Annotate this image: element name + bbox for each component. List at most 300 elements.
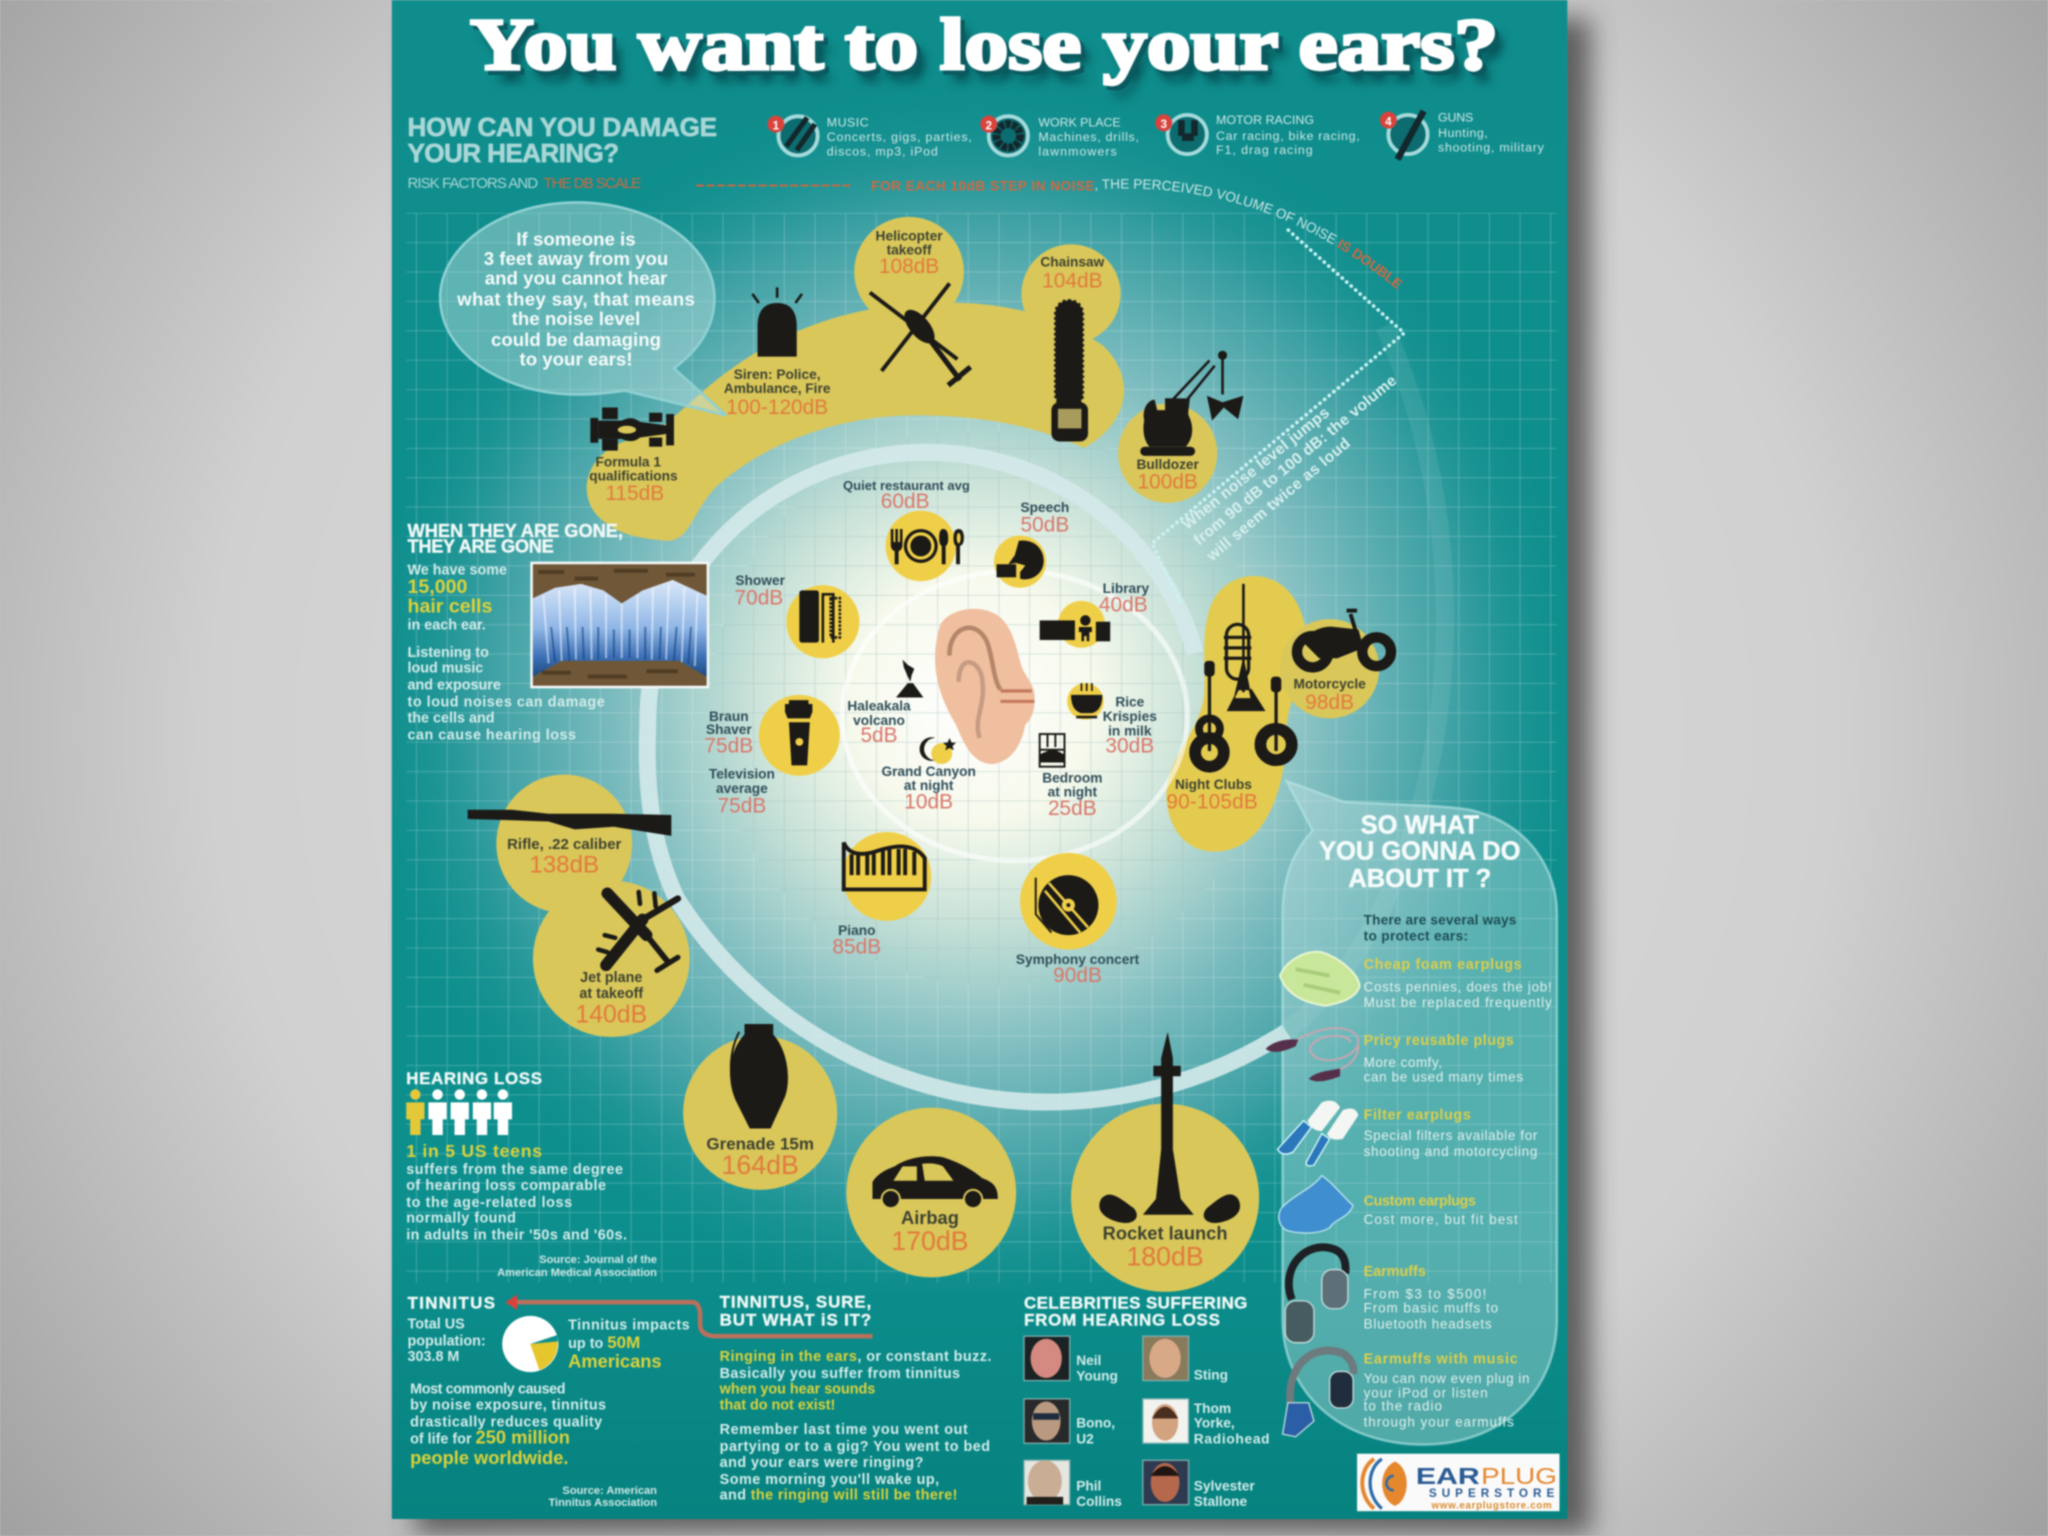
label: library: [1099, 581, 1149, 616]
option: earmuffs: From basic muffs to: [1364, 1301, 1498, 1316]
population: population:: [408, 1333, 486, 1349]
icon: rice bowl: [1071, 683, 1102, 718]
label: grand canyon: at night: [904, 778, 954, 793]
icon: trumpet: [1224, 584, 1264, 711]
statistic: 1 in 5 US teens: [406, 1141, 542, 1161]
rotated volume note: When noise level jumps: [1179, 404, 1333, 533]
name: Phil Collins: Collins: [1076, 1494, 1122, 1509]
option: custom earplugs: Cost more, but fit best: [1364, 1212, 1518, 1227]
icon: ear: [935, 609, 1035, 764]
section: what is tinnitus: [719, 1292, 991, 1503]
label: rice krispies: [1103, 695, 1157, 757]
option: foam earplugs: [1280, 952, 1552, 1010]
bubble text: to your ears!: [519, 349, 633, 370]
label: night clubs: [1166, 777, 1258, 813]
population: [408, 1316, 486, 1365]
label: airbag: [891, 1207, 969, 1256]
label: symphony: Symphony concert: [1016, 952, 1140, 967]
risk factor: work place: WORK PLACE: [1038, 116, 1121, 130]
label: bulldozer: Bulldozer: [1136, 457, 1200, 472]
label: piano: Piano: [838, 923, 875, 938]
label: rice krispies: 30dB: [1105, 734, 1154, 757]
name: Phil Collins: [1076, 1478, 1122, 1509]
option: filter earplugs: Filter earplugs: [1364, 1107, 1471, 1123]
icon: guitars: [1195, 661, 1292, 767]
impact: [568, 1318, 690, 1372]
inner grid: [714, 432, 1234, 985]
dotted doubling line: [1152, 229, 1404, 601]
label: grenade: 164dB: [721, 1150, 799, 1180]
label: shower: Shower: [735, 573, 786, 588]
label: motorcycle: [1293, 676, 1366, 714]
section: celebrities: [1024, 1294, 1270, 1509]
icon: bedroom: [1040, 734, 1064, 767]
label: piano: 85dB: [832, 935, 881, 958]
text block: Remember last time you went out: [720, 1422, 968, 1438]
label: shower: [734, 573, 786, 610]
label: shaver: [704, 709, 753, 757]
label: bulldozer: [1136, 457, 1200, 493]
photo: Bono: [1024, 1399, 1070, 1443]
text block: in adults in their '50s and '60s.: [406, 1228, 627, 1244]
icon: volcano: [896, 660, 923, 697]
label: shaver: 75dB: [704, 734, 753, 757]
option: filter earplugs: [1277, 1101, 1538, 1166]
heading: CELEBRITIES SUFFERING: [1024, 1294, 1247, 1313]
bubble text: the noise level: [512, 308, 640, 329]
heading: [408, 520, 623, 556]
icon: siren: [752, 287, 802, 357]
yellow circle: bulldozer: [1118, 404, 1217, 503]
name: Bono: U2: [1076, 1431, 1094, 1446]
text block: 15,000: [408, 576, 468, 598]
source: [548, 1485, 657, 1509]
text block: Some morning you'll wake up,: [720, 1472, 939, 1488]
label: speech: 50dB: [1021, 514, 1069, 537]
text block: We have some: [408, 563, 507, 579]
text block: can cause hearing loss: [408, 727, 576, 743]
text block: of hearing loss comparable: [406, 1178, 606, 1194]
icon: library: [1040, 615, 1110, 641]
logo: ear plug superstore: EAR: [1416, 1463, 1480, 1489]
intro: to protect ears:: [1364, 928, 1468, 943]
text block: Most commonly caused: [410, 1382, 566, 1398]
name: Thom Yorke: Thom: [1194, 1401, 1231, 1416]
heading: YOU GONNA DO: [1319, 837, 1520, 865]
yellow circle: jet: [533, 880, 690, 1037]
logo: ear plug superstore: [1357, 1454, 1560, 1512]
icon: shower: [799, 590, 840, 643]
text block: of life for 250 million: [410, 1426, 570, 1447]
label: chainsaw: 104dB: [1042, 269, 1103, 292]
label: night clubs: 90-105dB: [1166, 790, 1258, 813]
option: earmuffs: Earmuffs: [1364, 1264, 1426, 1280]
label: grand canyon: 10dB: [904, 790, 953, 813]
heading: [1024, 1294, 1247, 1330]
icon: restaurant: [891, 529, 964, 564]
text block: and your ears were ringing?: [720, 1455, 923, 1471]
text block: [410, 1382, 606, 1468]
source: Tinnitus Association: [548, 1497, 657, 1509]
text block: [406, 1162, 627, 1244]
intro: There are several ways: [1364, 913, 1517, 928]
label: television: average: [716, 781, 768, 796]
yellow dots: inner circle: [759, 511, 1117, 950]
bubble text: 3 feet away from you: [484, 248, 668, 269]
label: rice krispies: in milk: [1108, 723, 1152, 738]
subheading: risk factors: [408, 175, 641, 192]
option: reusable plugs: can be used many times: [1364, 1069, 1523, 1084]
bubble text: If someone is: [516, 229, 636, 250]
heading: HEARING LOSS: [406, 1069, 542, 1088]
label: rifle: [507, 836, 622, 878]
heading: how can you damage: YOUR HEARING?: [408, 138, 619, 168]
photo: Sylvester Stallone: [1143, 1460, 1189, 1505]
label: grand canyon: [881, 764, 976, 813]
icon: helicopter: [870, 283, 970, 385]
risk factor: motor racing: [1155, 113, 1360, 157]
label: helicopter: 108dB: [879, 255, 939, 278]
subheading: risk factors: THE DB SCALE: [543, 175, 641, 192]
rotated volume note: from 90 dB to 100 dB: the volume: [1191, 372, 1400, 549]
label: rifle: 138dB: [529, 851, 599, 878]
label: night clubs: Night Clubs: [1175, 777, 1252, 792]
option: earmuffs with music: to the radio: [1364, 1399, 1442, 1414]
label: rice krispies: Rice: [1115, 695, 1145, 710]
label: haleakala: Haleakala: [847, 699, 911, 714]
label: library: 40dB: [1099, 593, 1148, 616]
risk factor: music: [767, 116, 972, 158]
risk factor: music: MUSIC: [827, 116, 869, 130]
risk factor: motor racing: Car racing, bike racing,: [1216, 129, 1360, 143]
text block: [719, 1349, 991, 1503]
name: Phil Collins: Phil: [1076, 1478, 1101, 1493]
label: motorcycle: Motorcycle: [1293, 676, 1366, 691]
heading: how can you damage: [408, 112, 717, 168]
text block: Ringing in the ears, or constant buzz.: [720, 1349, 991, 1365]
poster shadow: [415, 18, 1591, 1533]
photo: hair cells: [530, 562, 709, 688]
label: siren: [724, 367, 831, 419]
risk factor: work place: lawnmowers: [1038, 144, 1117, 158]
heading: [720, 1292, 871, 1330]
risk factor: guns: GUNS: [1438, 110, 1473, 124]
label: jet: Jet plane: [580, 970, 642, 986]
risk factor: guns: 4: [1385, 115, 1392, 128]
label: library: Library: [1103, 581, 1149, 596]
option: earmuffs: From $3 to $500!: [1364, 1286, 1486, 1301]
label: rocket: 180dB: [1126, 1242, 1204, 1272]
yellow circle: grenade: [683, 1036, 837, 1190]
option: filter earplugs: Special filters available for: [1364, 1128, 1538, 1143]
source: Source: Journal of the: [539, 1254, 657, 1266]
risk factor: work place: [980, 116, 1139, 158]
heading: FROM HEARING LOSS: [1024, 1311, 1220, 1330]
text block: [408, 563, 605, 743]
name: Sting: Sting: [1194, 1367, 1228, 1382]
option: earmuffs with music: [1283, 1351, 1529, 1437]
option: earmuffs: [1285, 1247, 1498, 1343]
heading: THEY ARE GONE: [408, 535, 554, 556]
section: tinnitus: [408, 1294, 690, 1509]
risk factor: music: Concerts, gigs, parties,: [827, 130, 972, 144]
text block: by noise exposure, tinnitus: [410, 1397, 606, 1413]
population: 303.8 M: [408, 1349, 459, 1365]
heading: TINNITUS: [408, 1294, 495, 1313]
icon: chainsaw: [1051, 300, 1088, 441]
label: grenade: Grenade 15m: [706, 1134, 814, 1153]
label: bedroom: 25dB: [1048, 797, 1097, 820]
text block: in each ear.: [408, 618, 486, 634]
yellow circle: rocket: [1071, 1104, 1259, 1292]
option: earmuffs: Bluetooth headsets: [1364, 1316, 1492, 1331]
name: Sylvester Stallone: Sylvester: [1194, 1478, 1255, 1493]
name: Neil Young: Young: [1076, 1369, 1118, 1384]
label: piano: [832, 923, 881, 958]
option: reusable plugs: More comfy,: [1364, 1055, 1442, 1070]
yellow circle: helicopter: [854, 217, 964, 327]
risk factor: music: 1: [773, 119, 780, 132]
option: earmuffs with music: your iPod or listen: [1364, 1386, 1488, 1401]
heading: TINNITUS, SURE,: [720, 1292, 871, 1311]
text block: and exposure: [408, 678, 501, 694]
label: helicopter: [876, 228, 943, 278]
impact: up to 50M: [568, 1333, 640, 1352]
risk factor: motor racing: F1, drag racing: [1216, 143, 1313, 157]
label: bulldozer: 100dB: [1137, 470, 1198, 493]
logo: ear plug superstore: PLUG: [1481, 1463, 1557, 1489]
label: rocket: Rocket launch: [1103, 1223, 1227, 1244]
curved scale caption: [695, 178, 1404, 290]
label: speech: [1021, 500, 1069, 537]
label: rice krispies: Krispies: [1103, 709, 1157, 724]
name: Sylvester Stallone: Stallone: [1194, 1494, 1247, 1509]
label: bedroom: [1042, 770, 1102, 820]
yellow circle: rifle: [496, 775, 632, 913]
icon: piano: [844, 842, 925, 889]
photo: Neil Young: [1024, 1336, 1070, 1381]
text block: drastically reduces quality: [410, 1414, 602, 1430]
option: reusable plugs: [1266, 1028, 1523, 1084]
label: haleakala: 5dB: [860, 724, 898, 747]
option: foam earplugs: Cheap foam earplugs: [1364, 957, 1522, 973]
label: chainsaw: Chainsaw: [1040, 254, 1105, 269]
name: Bono: [1076, 1416, 1115, 1446]
label: haleakala: volcano: [853, 713, 905, 728]
heading: how can you damage: HOW CAN YOU DAMAGE: [408, 112, 717, 142]
label: airbag: 170dB: [891, 1226, 969, 1256]
yellow circle: airbag: [846, 1108, 1016, 1277]
inner ring: [842, 571, 1187, 861]
text block: Listening to: [408, 645, 489, 661]
text block: and the ringing will still be there!: [720, 1487, 957, 1503]
risk factor: motor racing: MOTOR RACING: [1216, 113, 1314, 127]
option: filter earplugs: shooting and motorcycling: [1364, 1144, 1537, 1159]
text block: Basically you suffer from tinnitus: [720, 1366, 960, 1382]
label: restaurant: Quiet restaurant avg: [843, 478, 970, 493]
option: earmuffs with music: through your earmuffs: [1364, 1414, 1514, 1429]
label: F1: 115dB: [605, 482, 664, 505]
icon: F1 car: [590, 408, 674, 451]
bubble text: what they say, that means: [456, 289, 695, 310]
title: You want to lose your ears?: [474, 8, 1502, 89]
option: earmuffs with music: Earmuffs with music: [1364, 1352, 1518, 1368]
name: Bono: Bono,: [1076, 1416, 1115, 1431]
risk factor: guns: [1380, 110, 1545, 159]
bubble text: [456, 229, 695, 370]
yellow circle: motorcycle: [1280, 619, 1379, 718]
yellow circle: chainsaw: [1021, 244, 1121, 344]
option: custom earplugs: [1279, 1176, 1518, 1233]
heading: ABOUT IT ?: [1348, 865, 1491, 893]
source: Source: American: [562, 1485, 657, 1497]
source: American Medical Association: [497, 1267, 657, 1279]
risk factor: work place: Machines, drills,: [1038, 130, 1139, 144]
label: F1: qualifications: [589, 469, 678, 484]
option: reusable plugs: Pricy reusable plugs: [1364, 1033, 1514, 1049]
population: Total US: [408, 1316, 465, 1332]
name: Neil Young: [1076, 1353, 1118, 1384]
curved scale caption: FOR EACH 10dB STEP IN NOISE: [871, 179, 1095, 194]
curved scale caption: , THE PERCEIVED VOLUME OF NOISE IS DOUBLE: [1094, 178, 1404, 290]
text block: people worldwide.: [410, 1447, 568, 1468]
text block: loud music: [408, 661, 483, 677]
label: airbag: Airbag: [901, 1207, 959, 1228]
central glow: [392, 78, 1567, 1293]
label: restaurant: 60dB: [881, 490, 930, 513]
icon: rocket: [1099, 1032, 1240, 1223]
text block: when you hear sounds: [719, 1382, 875, 1398]
label: motorcycle: 98dB: [1305, 691, 1354, 714]
label: F1: Formula 1: [595, 454, 661, 469]
name: Thom Yorke: Yorke,: [1194, 1416, 1235, 1431]
text block: partying or to a gig? You went to bed: [720, 1439, 990, 1455]
label: speech: Speech: [1021, 500, 1069, 515]
text block: that do not exist!: [720, 1397, 835, 1413]
heading: SO WHAT: [1361, 811, 1479, 839]
label: shaver: Braun: [709, 709, 749, 724]
logo: ear plug superstore: www.earplugstore.com: [1431, 1501, 1552, 1512]
icon: shaver: [785, 700, 812, 765]
yellow arc blob: loud noises: [587, 303, 1124, 541]
label: bedroom: Bedroom: [1042, 770, 1102, 785]
icon: jet: [598, 892, 678, 970]
icon: grenade: [730, 1024, 788, 1128]
label: siren: Siren: Police,: [734, 367, 821, 382]
label: jet: at takeoff: [579, 986, 643, 1002]
subheading: risk factors: RISK FACTORS AND: [408, 175, 538, 192]
label: shaver: Shaver: [706, 722, 752, 737]
option: foam earplugs: Must be replaced frequently: [1364, 995, 1552, 1010]
bubble text: and you cannot hear: [485, 268, 667, 289]
name: Thom Yorke: Radiohead: [1194, 1431, 1270, 1446]
pie chart: [502, 1316, 558, 1372]
option: earmuffs with music: You can now even plug in: [1364, 1371, 1529, 1386]
source: [497, 1254, 657, 1279]
label: helicopter: Helicopter: [876, 228, 943, 243]
icon: bulldozer: [1140, 351, 1243, 456]
label: jet: [575, 970, 647, 1029]
name: Thom Yorke: [1194, 1401, 1270, 1446]
text block: to loud noises can damage: [408, 695, 605, 711]
section: hearing loss: [406, 1069, 657, 1279]
label: grand canyon: Grand Canyon: [881, 764, 976, 779]
label: grenade: [706, 1134, 814, 1180]
label: chainsaw: [1040, 254, 1105, 292]
arrow: tinnitus: [505, 1294, 872, 1336]
text block: hair cells: [408, 596, 493, 618]
logo: ear plug superstore: SUPERSTORE: [1429, 1487, 1554, 1500]
title: You want to lose your ears?: [470, 4, 1498, 85]
label: helicopter: takeoff: [887, 243, 932, 258]
label: rocket: [1103, 1223, 1227, 1272]
risk factor: guns: Hunting,: [1438, 126, 1488, 140]
poster panel: [392, 0, 1567, 1519]
label: siren: Ambulance, Fire: [724, 381, 831, 396]
label: F1: [589, 454, 678, 505]
impact: Americans: [568, 1351, 662, 1372]
label: symphony: 90dB: [1053, 964, 1102, 987]
heading: [1319, 811, 1520, 893]
label: shower: 70dB: [734, 587, 783, 610]
rotated volume note: will seem twice as loud: [1203, 435, 1354, 565]
speech bubble: [440, 202, 726, 415]
intro: [1364, 913, 1517, 943]
panel: what to do: [1266, 781, 1557, 1445]
photo: Thom Yorke: [1143, 1399, 1189, 1443]
label: symphony: [1016, 952, 1140, 987]
label: siren: 100-120dB: [726, 396, 828, 419]
icon: motorcycle: [1297, 609, 1391, 667]
icon: grand canyon moon and star: [920, 737, 956, 761]
yellow blob: night clubs: [1166, 576, 1306, 852]
icon: rifle: [468, 810, 671, 836]
label: television: [709, 766, 775, 817]
option: custom earplugs: Custom earplugs: [1364, 1194, 1476, 1210]
icon: record: [1036, 875, 1098, 935]
heading: WHEN THEY ARE GONE,: [408, 520, 623, 541]
text block: the cells and: [408, 710, 494, 726]
label: jet: 140dB: [575, 1002, 647, 1029]
label: television: 75dB: [717, 794, 766, 817]
label: restaurant: [843, 478, 970, 513]
text block: normally found: [406, 1211, 516, 1227]
risk factor: music: discos, mp3, iPod: [827, 144, 938, 158]
name: Sylvester Stallone: [1194, 1478, 1255, 1509]
heading: BUT WHAT iS IT?: [720, 1311, 871, 1330]
photo: Sting: [1143, 1336, 1189, 1381]
risk factor: guns: shooting, military: [1438, 141, 1545, 155]
icon: car: [872, 1156, 998, 1208]
option: foam earplugs: Costs pennies, does the job!: [1364, 979, 1552, 994]
photo: Phil Collins: [1024, 1460, 1070, 1505]
label: rifle: Rifle, .22 caliber: [507, 836, 622, 853]
spiral ring: [647, 327, 1445, 1102]
impact: Tinnitus impacts: [568, 1318, 690, 1334]
grid: [406, 213, 1557, 1283]
icon: five people: [406, 1089, 512, 1135]
icon: speech: [997, 540, 1044, 579]
title: You want to lose your ears?: [479, 16, 1507, 97]
risk factor: work place: 2: [985, 119, 992, 132]
section: hair cells: [408, 520, 709, 743]
bubble text: could be damaging: [491, 329, 661, 350]
label: bedroom: at night: [1048, 785, 1097, 800]
label: television: Television: [709, 766, 775, 781]
risk factor: motor racing: 3: [1160, 118, 1167, 131]
name: Neil Young: Neil: [1076, 1353, 1101, 1368]
text block: to the age-related loss: [406, 1195, 572, 1211]
